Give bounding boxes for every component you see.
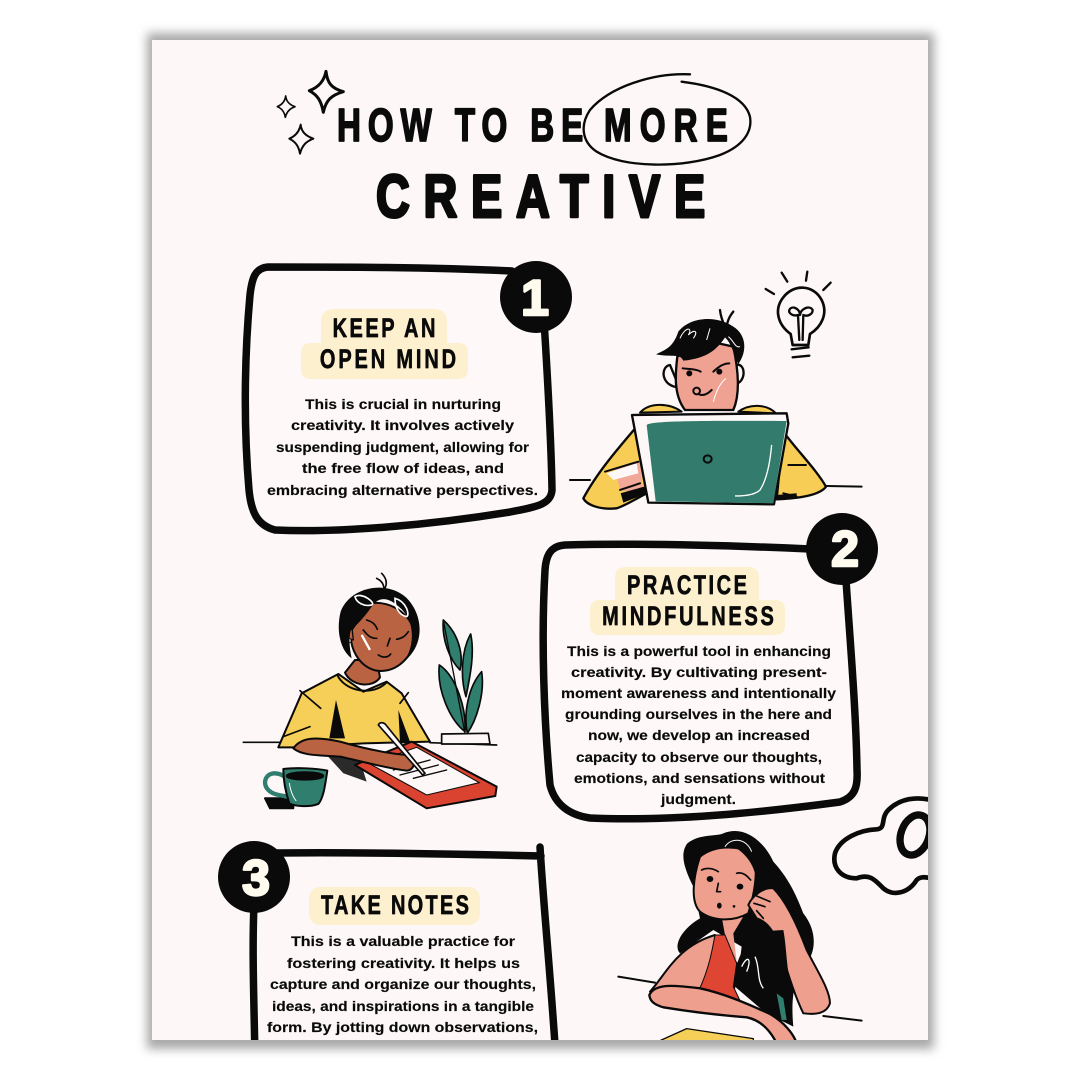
- illustration: thoughtful woman at desk: [618, 831, 862, 1043]
- body text 2: now, we develop an increased: [588, 727, 810, 743]
- title: [277, 71, 750, 230]
- body text 3: ideas, and inspirations in a tangible: [272, 998, 534, 1014]
- heading highlight 3: [309, 887, 480, 925]
- heading 1: OPEN MIND: [320, 344, 456, 375]
- stylus: [378, 723, 425, 775]
- screen highlight: [735, 445, 772, 496]
- body text 1: embracing alternative perspectives.: [267, 482, 538, 498]
- body text 1: This is crucial in nurturing: [305, 396, 501, 412]
- bubble scribble: [895, 811, 935, 859]
- laptop logo: [704, 455, 712, 463]
- body text 2: judgment.: [660, 791, 736, 807]
- title line: how to be more: MORE: [604, 101, 728, 151]
- number badge 1: [500, 261, 572, 333]
- body text 1: creativity. It involves actively: [291, 417, 514, 433]
- face: [676, 340, 738, 410]
- title line: how to be more: HOW TO BE: [337, 101, 583, 151]
- back hair: [677, 831, 814, 1027]
- hand-drawn ellipse around more: [584, 74, 750, 165]
- hair front lock: [735, 930, 792, 1017]
- body text 2: capacity to observe our thoughts,: [576, 749, 822, 765]
- cuffs and hands: [615, 462, 643, 493]
- yellow sleeves: [583, 427, 826, 509]
- hair top: [720, 836, 763, 873]
- panel 1: keep an open mind: [245, 261, 572, 531]
- neck: [722, 917, 743, 962]
- table line: [618, 977, 862, 1021]
- table line: [243, 742, 497, 745]
- ears: [664, 365, 744, 387]
- heading 2: MINDFULNESS: [602, 601, 774, 632]
- raised arm and hand: [748, 888, 830, 1014]
- icon: lightbulb: [766, 272, 831, 357]
- plant: [439, 620, 490, 744]
- panel 3 frame: [253, 847, 556, 1060]
- notebook: [660, 1029, 753, 1043]
- heading 1: [320, 318, 456, 369]
- body text 2: This is a powerful tool in enhancing: [567, 643, 831, 659]
- body text 2: moment awareness and intentionally: [561, 685, 836, 701]
- heading 2: PRACTICE: [627, 570, 747, 601]
- body text 2: emotions, and sensations without: [574, 770, 825, 786]
- face: [694, 847, 756, 919]
- face details: [683, 363, 729, 395]
- hair: [656, 319, 744, 364]
- heading 2: [603, 574, 774, 626]
- tablet: [355, 742, 497, 808]
- number badge 2: [806, 513, 878, 585]
- writing lines: [393, 760, 447, 778]
- panel 3: take notes: [218, 841, 556, 1060]
- title line: how to be more: [338, 108, 728, 142]
- body text 1: the free flow of ideas, and: [302, 460, 504, 476]
- heading highlight 2: [590, 567, 785, 635]
- panel 2: practice mindfulness: [543, 513, 878, 819]
- coffee cup: [265, 768, 327, 808]
- illustration: man with laptop and lightbulb: [570, 272, 862, 509]
- page sheet: [152, 40, 935, 1060]
- body text 3: form. By jotting down observations,: [267, 1019, 538, 1035]
- tablet page: [370, 747, 479, 795]
- thought bubble: [834, 798, 935, 893]
- table line: [570, 480, 862, 487]
- shirt: [278, 674, 430, 747]
- heading 1: KEEP AN: [333, 313, 435, 344]
- hair tuft and highlights: [377, 573, 386, 589]
- body text 3: fostering creativity. It helps us: [287, 955, 520, 971]
- hair: [339, 588, 420, 661]
- hair highlights: [680, 328, 740, 347]
- number badge 2: 2: [831, 521, 859, 577]
- title line: creative: CREATIVE: [376, 163, 705, 230]
- collar: [337, 675, 387, 691]
- body text 3: This is a valuable practice for: [291, 933, 516, 949]
- shirt folds: [283, 691, 408, 737]
- laptop: [632, 413, 788, 504]
- body text 3: [267, 933, 538, 1035]
- panel 1 frame: [245, 267, 552, 531]
- illustration: woman writing on tablet with plant and cup: [243, 573, 497, 808]
- sparkles: [277, 71, 343, 154]
- number badge 1: 1: [521, 270, 549, 326]
- face details: [363, 620, 408, 657]
- arm: [293, 738, 414, 771]
- laptop screen: [647, 421, 787, 503]
- heading 3: TAKE NOTES: [321, 890, 469, 921]
- body text 2: grounding ourselves in the here and: [565, 706, 832, 722]
- number badge 3: 3: [242, 850, 270, 906]
- panel 2 frame: [543, 544, 857, 819]
- body text 3: capture and organize our thoughts,: [270, 976, 536, 992]
- page shadow: [147, 33, 934, 1049]
- neck: [345, 660, 380, 685]
- body text 1: suspending judgment, allowing for: [276, 439, 530, 455]
- trousers shadow: [328, 756, 367, 782]
- red top: [699, 935, 740, 1001]
- face details: [702, 868, 751, 892]
- heading highlight 1: [301, 309, 468, 379]
- body text 1: [267, 396, 538, 498]
- front arm: [649, 986, 797, 1043]
- ear: [344, 625, 353, 640]
- face: [351, 603, 415, 671]
- body text 2: [561, 643, 836, 807]
- shoulder and torso skin: [650, 935, 737, 997]
- shoulders: [640, 405, 776, 413]
- pen: [777, 993, 787, 1020]
- hair tufts: [720, 310, 733, 330]
- number badge 3: [218, 841, 290, 913]
- body text 2: creativity. By cultivating present-: [571, 664, 827, 680]
